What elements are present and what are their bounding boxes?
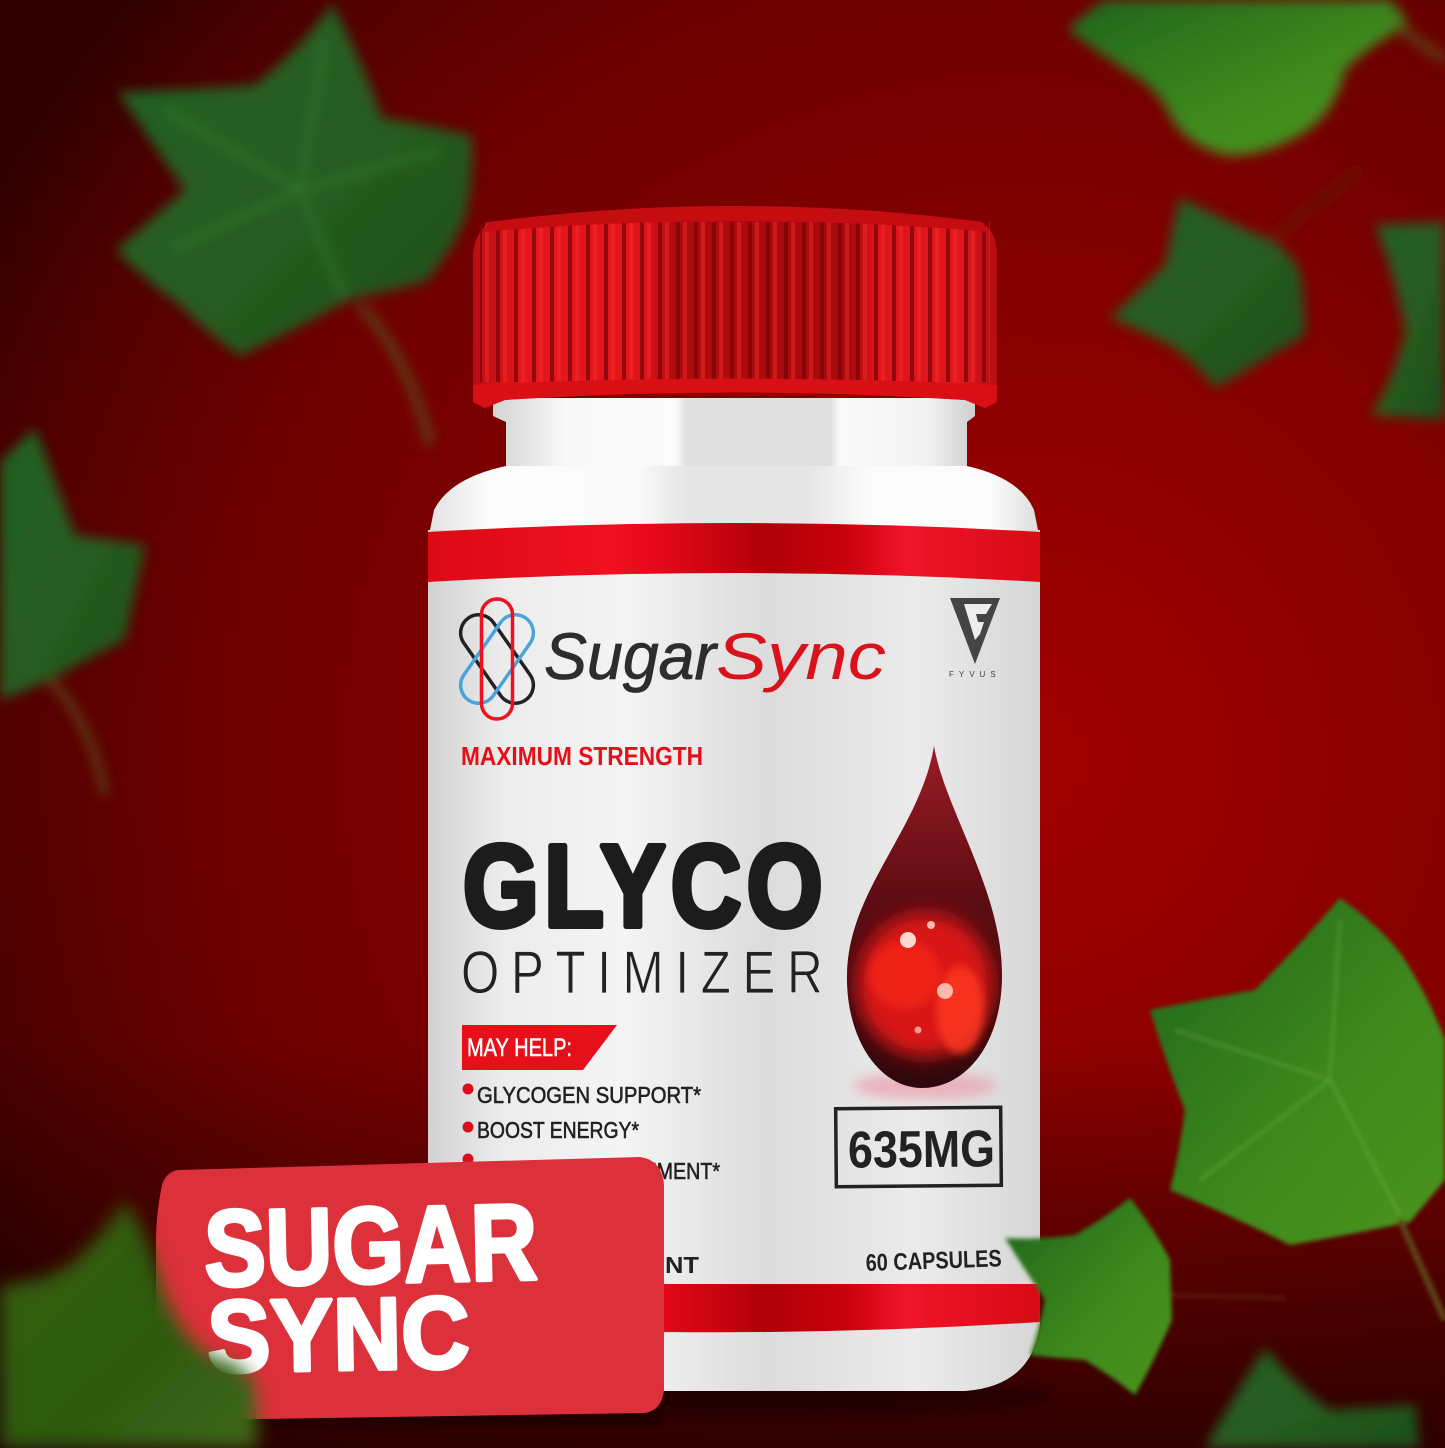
sugar sync tag: [156, 1157, 664, 1420]
leaf: bottom left: [0, 1200, 258, 1448]
brand mark: Fyvus: [949, 598, 1001, 679]
logo icon: [454, 599, 540, 719]
May Help tag: MAY HELP:: [467, 1034, 572, 1062]
bottle body: [428, 530, 1040, 1391]
bottle shadow: [415, 1377, 1055, 1417]
bottle cap: [473, 206, 997, 408]
635MG badge: [836, 1107, 1001, 1187]
capsule count: 60 CAPSULES: [865, 1245, 1002, 1277]
May Help tag: [462, 1025, 617, 1070]
product name: Optimizer: OPTIMIZER: [461, 938, 823, 1006]
leaf: top left: [116, 4, 472, 445]
logo wordmark: Sugar: [544, 619, 719, 693]
maximum strength: MAXIMUM STRENGTH: [461, 741, 703, 771]
leaf: lower right large: [1150, 898, 1445, 1320]
leaf: bottle front: [1005, 1198, 1285, 1395]
icon: blood drop: [847, 746, 1002, 1100]
brand mark: Fyvus: FYVUS: [949, 670, 1001, 679]
red band top: [428, 523, 1040, 582]
bottle shoulder: [428, 466, 1040, 540]
red band bottom: [660, 1284, 1040, 1332]
leaf: top right: [1068, 0, 1445, 155]
tag text: Sugar: SUGAR: [203, 1181, 538, 1309]
benefits list: GLYCOGEN SUPPORT*: [477, 1082, 701, 1108]
benefits list: [462, 1082, 720, 1278]
leaf: right upper: [1110, 170, 1360, 388]
logo: [454, 599, 886, 719]
leaf: left middle: [0, 428, 145, 795]
leaf: bottom right: [1205, 1348, 1420, 1448]
tag text: Sync: SYNC: [206, 1275, 470, 1394]
benefits list: HEALTHY MANAGEMENT*: [477, 1158, 720, 1184]
bottle: [415, 206, 1055, 1417]
benefits list: BOOST ENERGY*: [477, 1117, 639, 1143]
benefits list: NT: [665, 1252, 699, 1278]
bottle neck: [493, 398, 975, 470]
tag shadow: [200, 1410, 660, 1425]
leaf: right edge: [1370, 222, 1445, 420]
product name: Glyco: GLYCO: [463, 821, 823, 951]
635MG badge: 635MG: [848, 1120, 995, 1180]
logo: Sync: [716, 619, 886, 693]
